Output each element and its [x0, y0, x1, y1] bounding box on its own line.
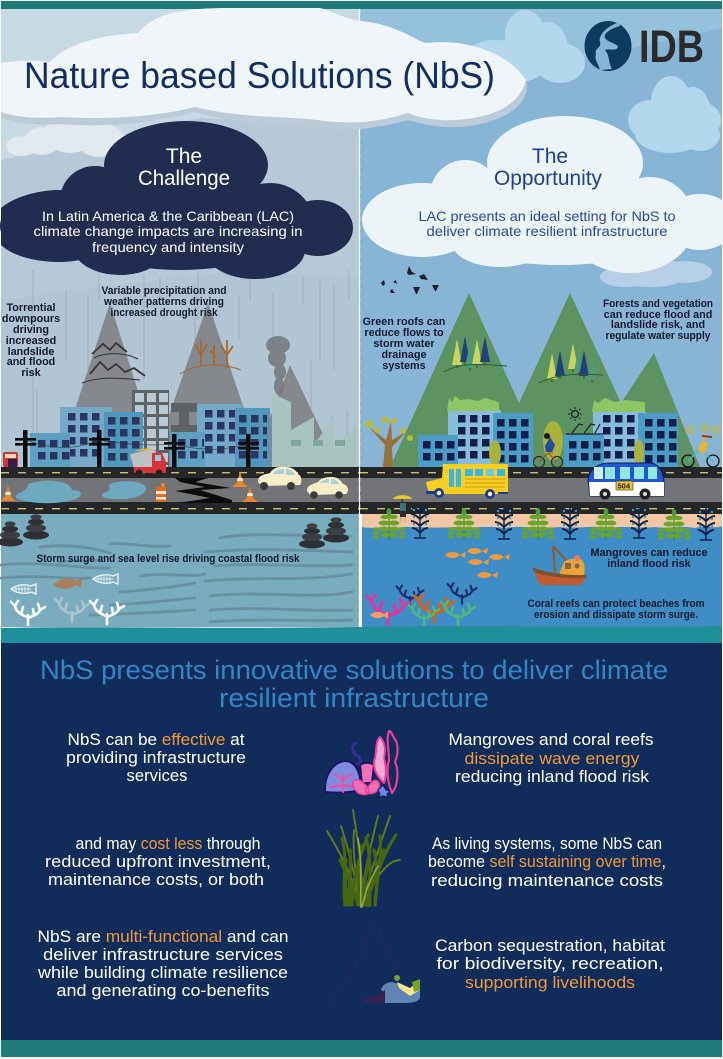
text: dissipate wave energy: Mangroves and coral reefs — [448, 730, 654, 749]
text: self sustaining: reducing maintenance costs — [431, 871, 663, 890]
label: forests and vegetation: can reduce flood and — [604, 309, 712, 321]
utility poles — [15, 430, 259, 471]
text: multi-functional — [37, 927, 289, 1000]
label: torrential downpours — [2, 302, 60, 379]
grey skyscraper — [132, 390, 169, 467]
text: effective: NbS can be effective at — [67, 730, 245, 749]
label: mangroves: Mangroves can reduce — [590, 547, 708, 559]
text: challenge intro: climate change impacts are increasing in — [34, 223, 302, 239]
person with umbrella — [393, 495, 412, 522]
cyclist — [534, 433, 562, 468]
traffic cones — [0, 471, 258, 502]
panel: the opportunity background — [360, 9, 722, 514]
text: self sustaining — [428, 834, 666, 890]
sea: challenge — [1, 514, 359, 627]
faint tree right — [685, 423, 721, 435]
title: Nature based Solutions (NbS) — [24, 55, 495, 96]
text: dissipate wave energy: reducing inland flood risk — [455, 767, 650, 786]
text: opportunity intro: deliver climate resilient infrastructure — [426, 223, 668, 239]
heading: solutions — [40, 655, 668, 713]
text: co-benefits — [435, 936, 665, 992]
fish group — [445, 548, 510, 578]
dead trees — [180, 340, 241, 374]
truck — [130, 449, 166, 476]
label: green roofs: systems — [382, 360, 426, 372]
car large — [258, 467, 301, 490]
label: variable precipitation — [102, 285, 226, 319]
text: effective: providing infrastructure — [66, 748, 246, 767]
text: multi-functional: while building climate resilience — [37, 963, 288, 982]
label: coral reefs: Coral reefs can protect beaches from — [528, 598, 704, 610]
cloud: the challenge — [0, 121, 353, 279]
waves — [1, 535, 352, 622]
text: opportunity intro — [418, 208, 676, 239]
label: mangroves: inland flood risk — [607, 558, 692, 570]
road: opportunity — [360, 467, 722, 514]
icon: seagrass — [327, 810, 400, 907]
heading: the opportunity: Opportunity — [494, 167, 602, 190]
label: variable precipitation: weather patterns driving — [103, 296, 224, 308]
sand — [362, 514, 722, 528]
factory windows — [291, 440, 345, 446]
cloud: the opportunity — [362, 116, 723, 273]
puddles — [16, 481, 146, 503]
label: torrential downpours: driving — [13, 324, 49, 336]
boat — [532, 546, 587, 585]
solar panels and sun — [566, 407, 603, 434]
teal shore band — [1, 626, 722, 643]
buildings: opportunity — [418, 396, 678, 467]
top teal bar — [1, 1, 722, 9]
text: opportunity intro: LAC presents an ideal setting for NbS to — [418, 208, 676, 224]
text: cost less: and may cost less through — [76, 834, 260, 853]
street trees — [489, 421, 644, 466]
text: self sustaining: become self sustaining over time, — [428, 852, 666, 871]
factory — [272, 394, 357, 467]
text: multi-functional: and generating co-benefits — [56, 981, 270, 1000]
road crack — [175, 478, 232, 503]
heading: the challenge: The — [166, 145, 202, 168]
barrel — [156, 483, 166, 502]
text: challenge intro: frequency and intensity — [92, 239, 244, 255]
mountains: challenge — [55, 303, 340, 470]
label: torrential downpours: Torrential — [6, 302, 56, 314]
text: co-benefits: for biodiversity, recreation, — [436, 954, 664, 973]
heading: solutions: resilient infrastructure — [219, 683, 489, 713]
school bus — [426, 464, 508, 499]
label: green roofs: reduce flows to — [364, 327, 444, 339]
text: cost less: maintenance costs, or both — [48, 870, 264, 889]
label: forests and vegetation: Forests and vegetation — [603, 298, 713, 310]
title cloud — [1, 8, 527, 130]
label: green roofs — [363, 316, 445, 372]
small cloud left — [6, 115, 127, 157]
label: torrential downpours: landslide — [8, 346, 54, 358]
tree left — [365, 416, 413, 468]
icon: person fishing — [326, 921, 420, 1006]
label: forests and vegetation — [603, 298, 713, 342]
label: coral reefs — [528, 598, 704, 621]
panel: the challenge background — [1, 9, 359, 514]
heading: the opportunity: The — [532, 145, 568, 168]
cyclist right — [682, 434, 719, 467]
logo: IDB — [584, 21, 704, 72]
fish near coral — [370, 611, 388, 619]
label: variable precipitation: Variable precipitation and — [102, 285, 226, 297]
smoke — [266, 336, 290, 395]
text: cost less — [45, 834, 271, 889]
car small — [307, 477, 348, 499]
small cloud right — [628, 76, 721, 153]
text: co-benefits: Carbon sequestration, habitat — [435, 936, 665, 955]
text: challenge intro — [34, 208, 302, 255]
road: challenge — [1, 467, 359, 514]
label: green roofs: Green roofs can — [363, 316, 445, 328]
label: torrential downpours: downpours — [2, 313, 60, 325]
birds — [381, 266, 439, 294]
buildings: challenge — [30, 404, 270, 467]
label: torrential downpours: increased — [6, 335, 56, 347]
text: challenge intro: In Latin America & the Caribbean (LAC) — [42, 208, 294, 224]
label: torrential downpours: and flood — [7, 356, 55, 368]
small cloud top right — [467, 10, 585, 83]
blue bus: 504 — [618, 482, 631, 490]
text: multi-functional: NbS are multi-functional and can — [38, 927, 288, 946]
label: coral reefs: erosion and dissipate storm surge. — [534, 609, 698, 621]
sea: opportunity — [362, 526, 722, 627]
label: green roofs: storm water — [373, 338, 435, 350]
dark grey building — [171, 403, 197, 445]
text: multi-functional: deliver infrastructure services — [43, 945, 283, 964]
rocks — [0, 514, 349, 548]
text: dissipate wave energy: dissipate wave energy — [464, 749, 640, 768]
label: torrential downpours: risk — [21, 367, 42, 379]
text: dissipate wave energy — [448, 730, 654, 786]
heading: the challenge: Challenge — [138, 167, 230, 190]
label: mangroves — [590, 547, 708, 570]
heading: the challenge — [138, 145, 230, 190]
label: variable precipitation: increased drought risk — [110, 307, 218, 319]
panel: solutions background — [1, 643, 722, 1040]
forest on mountain 2 — [539, 343, 603, 383]
dashed divider — [358, 9, 360, 627]
text: effective: services — [126, 766, 188, 785]
text: co-benefits: supporting livelihoods — [465, 973, 635, 992]
text: effective — [66, 730, 246, 785]
forest on mountain 1 — [444, 336, 507, 372]
label: storm surge: Storm surge and sea level rise driving coastal flood risk — [36, 553, 300, 565]
houses on slope — [82, 343, 145, 383]
mountains: opportunity — [390, 293, 700, 467]
coral reef — [367, 583, 476, 625]
fuel pump — [3, 452, 18, 467]
rain: challenge — [33, 265, 349, 480]
bottom teal bar — [1, 1040, 722, 1057]
blue bus — [588, 463, 664, 500]
text: self sustaining: As living systems, some NbS can — [432, 834, 662, 853]
logo: IDB: IDB — [639, 21, 704, 72]
icon: coral — [325, 731, 398, 797]
heading: the opportunity — [494, 145, 602, 190]
label: forests and vegetation: landslide risk, and — [611, 319, 705, 331]
mangroves — [373, 505, 715, 541]
small pale cloud lower right — [600, 257, 712, 287]
label: forests and vegetation: regulate water supply — [606, 330, 710, 342]
label: green roofs: drainage — [381, 349, 427, 361]
heading: solutions: NbS presents innovative solutions to deliver climate — [40, 655, 668, 685]
text: cost less: reduced upfront investment, — [45, 852, 271, 871]
dead fish and bleached coral — [11, 574, 124, 625]
